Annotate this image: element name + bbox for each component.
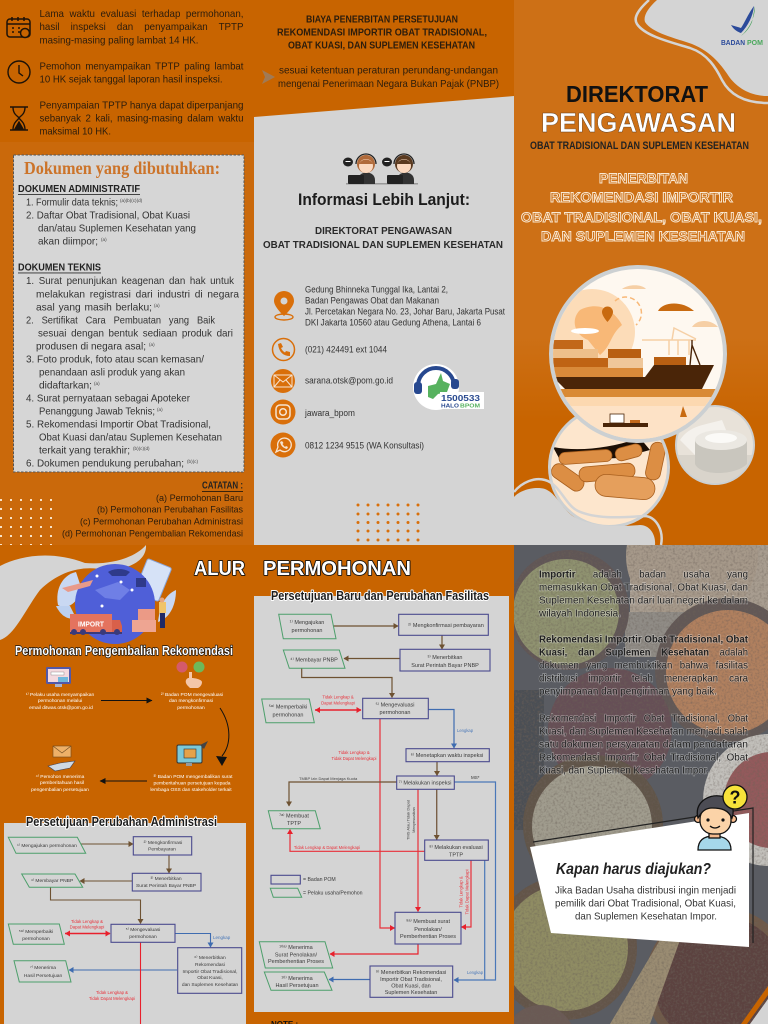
text block: dokumen teknis: Penanggung Jawab Teknis; [39, 406, 155, 418]
flowchart: persetujuan baru dan perubahan fasilitas: TPTP [449, 852, 463, 858]
flowchart: persetujuan baru dan perubahan fasilitas: ³⁾ Menerbitkan [428, 654, 462, 661]
flowchart: persetujuan baru dan perubahan fasilitas: ¹⁾ Mengajukan [290, 619, 324, 626]
step: pengembalian surat: lembaga OSS dan stakeholder terkait [150, 787, 232, 793]
flowchart: persetujuan baru dan perubahan fasilitas: ⁷ᵃ⁾ Membuat [279, 812, 309, 820]
heading: dokumen yang dibutuhkan: Dokumen yang dibutuhkan: [24, 158, 220, 178]
flowchart: perubahan administrasi: Hasil Persetujuan [24, 973, 62, 979]
decor: bottom right corner stripe [741, 986, 768, 1024]
flowchart: persetujuan baru dan perubahan fasilitas [259, 614, 496, 997]
text block: dokumen teknis: (b)(c)(d) [133, 446, 150, 451]
text: email address: sarana.otsk@pom.go.id [305, 376, 393, 386]
decor: orange dots [356, 504, 420, 542]
logo: halo bpom: 1500533 [441, 393, 480, 403]
flowchart: persetujuan baru dan perubahan fasilitas: Tidak Lengkap & [458, 876, 464, 908]
text: phone number: (021) 424491 ext 1044 [305, 344, 388, 356]
text block: biaya penerbitan: BIAYA PENERBITAN PERSETUJUAN [306, 14, 458, 26]
arrow: step 3 to 4 [100, 780, 147, 782]
flowchart: persetujuan baru dan perubahan fasilitas: MS* [471, 775, 480, 780]
text block: dokumen teknis: 4. Surat pernyataan sebagai Apoteker [26, 392, 190, 404]
flowchart: persetujuan baru dan perubahan fasilitas: = Pelaku usaha/Pemohon [303, 890, 363, 896]
flowchart: persetujuan baru dan perubahan fasilitas: permohonan [380, 710, 410, 716]
text block: biaya penerbitan: OBAT KUASI, DAN SUPLEMEN KESEHATAN [288, 40, 475, 52]
text: whatsapp number: 0812 1234 9515 (WA Konsultasi) [305, 440, 424, 452]
callout: kapan harus diajukan: pemilik dari Obat Tradisional, Obat Kuasi, [555, 898, 736, 910]
text block: dokumen teknis: (a) [154, 303, 160, 308]
icon: clock [8, 61, 30, 83]
icon: instagram [270, 400, 296, 424]
panel: spine strip orange [512, 545, 514, 1024]
text block: importir definition: Rekomendasi Importir Obat Tradisional, Obat [539, 634, 748, 646]
title: Direktorat Pengawasan [530, 81, 749, 152]
flowchart: persetujuan baru dan perubahan fasilitas: ⁴⁾ Membayar PNBP [290, 656, 338, 664]
text block: dokumen administratif: 1. Formulir data teknis; [26, 196, 118, 208]
flowchart: perubahan administrasi: ¹⁾ Mengajukan permohonan [17, 843, 77, 849]
step: evaluasi: dan mengkonfirmasi [169, 698, 213, 704]
flowchart: persetujuan baru dan perubahan fasilitas: ¹⁰ᵃ⁾ Menerima [279, 944, 314, 951]
flowchart: perubahan administrasi: ⁷⁾ Menerima [30, 965, 56, 971]
text block: pnbp: mengenai Penerimaan Negara Bukan Pajak (PNBP) [278, 78, 499, 90]
callout: kapan harus diajukan: dan Suplemen Kesehatan Impor. [575, 910, 717, 922]
text block: address: Gedung Bhinneka Tunggal Ika, Lantai 2, [305, 284, 448, 296]
text block: dokumen teknis: (b)(c) [187, 459, 198, 464]
flowchart: persetujuan baru dan perubahan fasilitas: ⁶⁾ Menetapkan waktu inspeksi [411, 752, 483, 759]
flowchart: persetujuan baru dan perubahan fasilitas: ⁵ᵃ⁾ Memperbaiki [269, 704, 307, 710]
flowchart: persetujuan baru dan perubahan fasilitas: permohonan [292, 628, 322, 634]
flowchart: persetujuan baru dan perubahan fasilitas: ⁸⁾ Melakukan evaluasi [429, 844, 483, 851]
icon: thinking person: ? [730, 788, 740, 808]
flowchart: persetujuan baru dan perubahan fasilitas: Obat Kuasi, dan [391, 984, 431, 990]
step: pengembalian surat: pemberitahuan persetujuan kepada [154, 780, 231, 786]
flowchart: persetujuan baru dan perubahan fasilitas: Menyesuaikan [411, 807, 416, 833]
text block: dokumen administratif [18, 183, 196, 248]
flowchart: perubahan administrasi: Rekomendasi [195, 962, 225, 968]
flowchart: persetujuan baru dan perubahan fasilitas: Importir Obat Tradisional, [380, 977, 442, 983]
step: pengajuan email: permohonan melalui [38, 698, 82, 704]
panel: persetujuan perubahan administrasi [4, 823, 246, 1024]
title: Direktorat Pengawasan: DIREKTORAT [566, 81, 708, 107]
flowchart: persetujuan baru dan perubahan fasilitas: Tidak Lengkap & Dapat Melengkapi [294, 845, 360, 850]
heading: Penerbitan Rekomendasi Importir: PENERBITAN [599, 170, 688, 186]
panel: bottom cover wave [514, 479, 662, 545]
flowchart: perubahan administrasi: Pembayaran [148, 846, 176, 852]
flowchart: perubahan administrasi: ⁵⁾ Mengevaluasi [126, 927, 160, 933]
text block: dokumen administratif: (a) [101, 237, 107, 242]
flowchart: perubahan administrasi: ²⁾ Mengkonfirmasi [144, 840, 182, 846]
text block: catatan [62, 480, 243, 540]
flowchart: persetujuan baru dan perubahan fasilitas: Surat Penolakan/ [275, 952, 318, 958]
step: pengajuan email [26, 667, 94, 711]
icon: Badan POM logo: POM [747, 40, 763, 47]
flowchart: persetujuan baru dan perubahan fasilitas: Suplemen Kesehatan [385, 990, 437, 996]
text block: importir definition: dokumen yang membuktikan bahwa fasilitas [539, 660, 748, 672]
text block: importir definition: wilayah Indonesia. [538, 608, 621, 620]
illustration: cargo ship in circle [549, 265, 730, 447]
icon: arrow bullet [262, 70, 275, 84]
illustration: import globe and truck [56, 558, 176, 644]
text block: dokumen administratif: akan diimpor; [38, 236, 98, 248]
text block: dokumen teknis: 5. Rekomendasi Importir Obat Tradisional, [26, 418, 211, 430]
text block: catatan: (b) Permohonan Perubahan Fasilitas [97, 504, 243, 516]
heading: persetujuan baru dan perubahan fasilitas: Persetujuan Baru dan Perubahan Fasilitas [271, 589, 489, 603]
text block: importir definition: Kuasi, dan Suplemen Kesehatan menjadi salah [539, 726, 748, 738]
text block: catatan: (c) Permohonan Perubahan Administrasi [80, 516, 243, 528]
text block: address: DKI Jakarta 10560 atau Gedung Athena, Lantai 6 [305, 318, 481, 328]
heading: persetujuan perubahan administrasi: Persetujuan Perubahan Administrasi [26, 814, 217, 829]
flowchart: persetujuan baru dan perubahan fasilitas: TPTP [287, 821, 301, 827]
heading: Penerbitan Rekomendasi Importir: DAN SUPLEMEN KESEHATAN [541, 228, 745, 244]
panel: spice photo background [514, 545, 768, 1024]
text block: dokumen teknis: Obat Kuasi dan/atau Suplemen Kesehatan [39, 432, 222, 444]
flowchart: perubahan administrasi: Obat Kuasi, [197, 975, 223, 981]
text block: catatan: CATATAN : [202, 480, 243, 492]
flowchart: persetujuan baru dan perubahan fasilitas: Hasil Persetujuan [275, 983, 319, 989]
icon: hourglass [10, 107, 28, 130]
flowchart: persetujuan baru dan perubahan fasilitas: TMBP Izin Dapat Menjaga Kuota [299, 776, 358, 781]
illustration: import globe and truck: IMPORT [78, 620, 104, 628]
text block: dokumen administratif: (a)(b)(c)(d) [120, 198, 143, 203]
text block: importir definition: Rekomendasi Importir Obat Tradisional, Obat [539, 752, 748, 764]
step: evaluasi: permohonan [177, 705, 205, 711]
icon: whatsapp [270, 432, 296, 458]
text block: dokumen teknis: melakukan registrasi dari industri di negara [36, 288, 239, 300]
step: evaluasi [161, 662, 223, 711]
step: evaluasi: ²⁾ Badan POM mengevaluasi [161, 692, 223, 698]
text block: importir definition: Importir adalah badan usaha yang [539, 568, 748, 580]
text block: dokumen teknis: (a) [94, 381, 100, 386]
title: Direktorat Pengawasan: PENGAWASAN [541, 107, 736, 138]
flowchart: perubahan administrasi: ⁵ᵃ⁾ Memperbaiki [19, 929, 53, 935]
text block: dokumen teknis: asal yang masih berlaku; [36, 302, 152, 314]
flowchart: perubahan administrasi: ³⁾ Menerbitkan [150, 876, 182, 882]
text block: dokumen teknis: (a) [149, 342, 155, 347]
step: pengajuan email: email ditwas.otsk@pom.go.id [29, 705, 93, 711]
text block: importir definition: distribusi importir telah menerapkan cara [539, 672, 748, 684]
logo: halo bpom: BPOM [460, 404, 481, 410]
text block: timing notes: 10 HK sejak tanggal laporan hasil inspeksi. [40, 74, 222, 86]
text block: biaya penerbitan [277, 14, 487, 52]
text block: address: Badan Pengawas Obat dan Makanan [305, 296, 439, 306]
step: pemohon menerima: pemberitahuan hasil [40, 780, 84, 786]
text block: dokumen teknis: sesuai dengan bentuk sediaan produk dari [38, 328, 233, 340]
flowchart: perubahan administrasi: dan Suplemen Kesehatan [182, 982, 238, 988]
text block: importir definition: Rekomendasi Importir Obat Tradisional, Obat [539, 712, 748, 724]
flowchart: persetujuan baru dan perubahan fasilitas: Dapat Melengkapi [321, 700, 355, 706]
text block: pnbp: sesuai ketentuan peraturan perundang-undangan [279, 64, 498, 76]
panel: orange bottom left and middle band [0, 545, 512, 597]
flowchart: persetujuan baru dan perubahan fasilitas: Lengkap [467, 970, 484, 975]
flowchart: perubahan administrasi: permohonan [129, 934, 157, 940]
text block: importir definition: memasukkan Obat Tradisional, Obat Kuasi, dan [539, 582, 748, 594]
step: pengembalian surat: ³⁾ Badan POM mengembalikan surat [154, 774, 233, 780]
text block: timing notes: masing-masing paling lambat 14 HK. [40, 34, 198, 46]
text block: pnbp [278, 64, 499, 90]
flowchart: perubahan administrasi: Surat Perintah Bayar PNBP [136, 883, 196, 889]
flowchart: perubahan administrasi: permohonan [22, 936, 50, 942]
step: pemohon menerima [31, 746, 89, 793]
arrow: step 2 to 3 [216, 708, 229, 766]
title: alur permohonan: PERMOHONAN [263, 558, 411, 580]
flowchart: perubahan administrasi: Tidak Lengkap & [96, 990, 128, 995]
text block: catatan: (d) Permohonan Pengembalian Rekomendasi [62, 528, 243, 540]
text block: timing notes: Lama waktu evaluasi terhadap permohonan, [40, 8, 244, 20]
icon: calendar clock [7, 17, 30, 38]
photo: spice bowls [514, 545, 768, 1024]
text block: importir definition: penyimpanan dan pengiriman yang baik. [539, 686, 717, 698]
icon: location pin [274, 291, 294, 320]
callout: kapan harus diajukan: Jika Badan Usaha distribusi ingin menjadi [555, 884, 736, 896]
text block: address: Jl. Percetakan Negara No. 23, Johar Baru, Jakarta Pusat [305, 306, 505, 318]
panel: documents required [14, 155, 244, 472]
heading: permohonan pengembalian rekomendasi: Permohonan Pengembalian Rekomendasi [15, 644, 233, 658]
flowchart: persetujuan baru dan perubahan fasilitas: ⁹ᵃ⁾ Membuat surat [406, 918, 450, 925]
text block: direktorat: DIREKTORAT PENGAWASAN [315, 225, 452, 237]
text block: dokumen teknis: 6. Dokumen pendukung perubahan; [26, 458, 184, 470]
text block: dokumen administratif: DOKUMEN ADMINISTRATIF [18, 183, 141, 195]
text block: catatan: (a) Permohonan Baru [156, 493, 243, 504]
text block: timing notes: Pemohon menyampaikan TPTP paling lambat [40, 60, 244, 72]
text block: dokumen teknis: didaftarkan; [39, 380, 92, 392]
flowchart: perubahan administrasi: Dapat Melengkapi [70, 924, 104, 930]
flowchart: persetujuan baru dan perubahan fasilitas: Lengkap [457, 728, 474, 733]
text block: dokumen teknis: produsen di negara asal; [36, 340, 146, 352]
text block: dokumen teknis: penandaan asli produk yang akan [39, 366, 185, 378]
flowchart: persetujuan baru dan perubahan fasilitas: Tidak Lengkap & [338, 750, 370, 755]
flowchart: perubahan administrasi: Tidak Lengkap & [71, 919, 103, 924]
flowchart: persetujuan baru dan perubahan fasilitas: Tidak Dapat Melengkapi [464, 869, 470, 915]
heading: informasi lebih lanjut: Informasi Lebih Lanjut: [298, 190, 470, 209]
text block: dokumen teknis: terkait yang terakhir; [39, 444, 130, 456]
heading: Penerbitan Rekomendasi Importir: REKOMENDASI IMPORTIR [550, 189, 733, 205]
panel: lighter tone on the cover and left column [0, 0, 768, 545]
flowchart: persetujuan baru dan perubahan fasilitas: ⁷⁾ Melakukan inspeksi [399, 780, 451, 786]
text block: timing notes: hasil inspeksi dan penyampaikan TPTP [40, 21, 244, 33]
text block: direktorat: OBAT TRADISIONAL DAN SUPLEMEN KESEHATAN [263, 239, 503, 251]
icon: phone [272, 338, 294, 360]
text block: dokumen teknis: 2. Sertifikat Cara Pembuatan yang Baik [26, 314, 216, 326]
flowchart: persetujuan baru dan perubahan fasilitas: Penolakan/ [414, 927, 442, 933]
decor: bottom left grey wave [0, 545, 146, 640]
panel: cover top right wave [636, 0, 768, 103]
text block: address [305, 284, 505, 328]
flowchart: persetujuan baru dan perubahan fasilitas: ¹⁰⁾ Menerima [281, 975, 314, 982]
text: instagram handle: jawara_bpom [304, 408, 355, 419]
icon: thinking person [694, 785, 747, 850]
arrow: step 1 to 2 [101, 700, 152, 702]
flowchart: persetujuan baru dan perubahan fasilitas: Surat Perintah Bayar PNBP [411, 663, 479, 669]
text block: importir definition: Kuasi, dan Suplemen Kesehatan Impor. [539, 764, 709, 776]
flowchart: perubahan administrasi: Importir Obat Tradisional, [183, 969, 237, 975]
text block: importir definition: satu dokumen persyaratan dalam pendaftaran [539, 738, 748, 750]
decor: white dots [0, 499, 52, 545]
flowchart: persetujuan baru dan perubahan fasilitas: ⁵⁾ Mengevaluasi [375, 702, 415, 708]
flowchart: persetujuan baru dan perubahan fasilitas: = Badan POM [303, 877, 336, 883]
step: pemohon menerima: pengembalian persetujuan [31, 787, 89, 793]
flowchart: perubahan administrasi [8, 837, 242, 1024]
text block: dokumen teknis [18, 262, 239, 470]
flowchart: persetujuan baru dan perubahan fasilitas: Tidak Lengkap & [322, 694, 354, 700]
flowchart: perubahan administrasi: ⁶⁾ Menerbitkan [194, 955, 226, 961]
text block: biaya penerbitan: REKOMENDASI IMPORTIR OBAT TRADISIONAL, [277, 28, 487, 38]
flowchart: persetujuan baru dan perubahan fasilitas: ⁹⁾ Menerbitkan Rekomendasi [376, 969, 446, 976]
flowchart: perubahan administrasi: ⁴⁾ Membayar PNBP [31, 878, 73, 884]
flowchart: persetujuan baru dan perubahan fasilitas: Pemberhentian Proses [268, 959, 324, 965]
logo: halo bpom [413, 364, 484, 410]
icon: Badan POM logo: BADAN [721, 40, 745, 47]
photo: capsules in circle [548, 416, 670, 526]
panel: contact information background [254, 96, 514, 545]
flowchart: persetujuan baru dan perubahan fasilitas: permohonan [273, 712, 303, 718]
icon: Badan POM logo [721, 6, 763, 47]
text block: dokumen teknis: 3. Foto produk, foto atau scan kemasan/ [26, 354, 204, 366]
flowchart: persetujuan baru dan perubahan fasilitas: TMS Atau Tidak Dapat [406, 799, 410, 840]
title: alur permohonan: ALUR [194, 558, 246, 580]
flowchart: persetujuan baru dan perubahan fasilitas: Pemberhentian Proses [400, 934, 456, 940]
icon: customer service agents [343, 154, 418, 184]
text block: timing notes: maksimal 10 HK. [40, 126, 111, 138]
logo: halo bpom: HALO [441, 404, 460, 410]
flowchart: perubahan administrasi: Lengkap [213, 935, 231, 940]
callout: kapan harus diajukan: Kapan harus diajukan? [556, 861, 711, 878]
flowchart: persetujuan baru dan perubahan fasilitas: ²⁾ Mengkonfirmasi pembayaran [408, 622, 484, 629]
text block: importir definition [538, 568, 748, 776]
text block: dokumen teknis: DOKUMEN TEKNIS [18, 262, 101, 274]
text block: timing notes [40, 8, 244, 138]
text block: importir definition: Suplemen Kesehatan dari luar negeri ke dalam [539, 594, 748, 606]
flowchart: persetujuan baru dan perubahan fasilitas: Tidak Dapat Melengkapi [331, 756, 377, 761]
heading: Penerbitan Rekomendasi Importir: OBAT TRADISIONAL, OBAT KUASI, [521, 209, 762, 225]
step: pengajuan email: ¹⁾ Pelaku usaha menyampaikan [26, 692, 94, 698]
text block: timing notes: sebanyak 2 kali, masing-masing dalam waktu [40, 112, 244, 124]
step: pengembalian surat [150, 741, 233, 793]
step: pemohon menerima: ⁴⁾ Pemohon menerima [36, 774, 85, 780]
flowchart: perubahan administrasi: Tidak Dapat Melengkapi [89, 996, 135, 1001]
text block: importir definition: Kuasi, dan Suplemen Kesehatan adalah [539, 646, 748, 658]
callout: kapan harus diajukan [530, 808, 753, 947]
text block: dokumen teknis: (a) [157, 407, 163, 412]
text block: dokumen administratif: dan/atau Suplemen Kesehatan yang [38, 222, 196, 234]
panel: persetujuan baru [254, 596, 509, 1012]
photo: cream jar in circle [675, 405, 755, 485]
text block: dokumen teknis: 1. Surat penunjukan keagenan dan hak untuk [26, 275, 235, 287]
icon: email [271, 369, 295, 393]
text block: timing notes: Penyampaian TPTP hanya dapat diperpanjang [40, 100, 244, 112]
title: alur permohonan [194, 558, 411, 580]
text block: dokumen administratif: 2. Daftar Obat Tradisional, Obat Kuasi [26, 210, 190, 222]
text block: direktorat [263, 225, 503, 251]
heading: Penerbitan Rekomendasi Importir [521, 170, 762, 244]
